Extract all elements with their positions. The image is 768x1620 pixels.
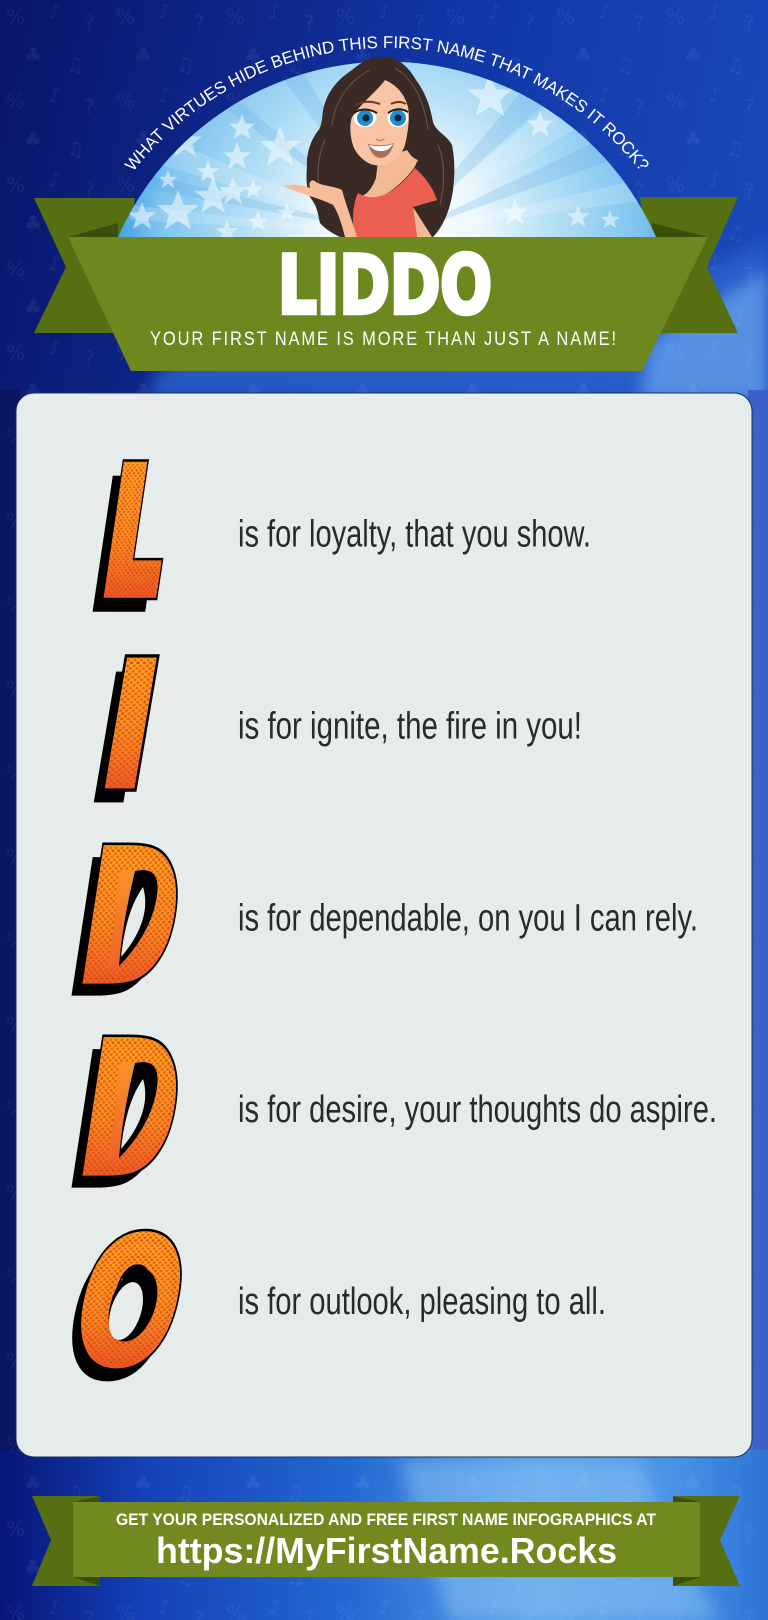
text: I line: is for ignite, the fire in you! (238, 706, 582, 748)
text: L line: is for loyalty, that you show. (238, 514, 591, 556)
letter D: D (68, 813, 194, 1023)
sunburst dome with stars (118, 62, 656, 237)
letter O: O (61, 1206, 199, 1401)
tagline: YOUR FIRST NAME IS MORE THAN JUST A NAME! (150, 328, 618, 350)
letter D second: D (57, 1017, 183, 1227)
letter D second: D (68, 1005, 194, 1215)
letter D second: D (68, 1005, 194, 1215)
letter I: I (89, 628, 171, 826)
text: O line: is for outlook, pleasing to all. (238, 1281, 606, 1323)
curved heading: WHAT VIRTUES HIDE BEHIND THIS FIRST NAME THAT MAKES IT ROCK? (124, 36, 649, 170)
letter D: D (68, 813, 194, 1023)
letter L: L (94, 435, 179, 631)
letter D: D (68, 813, 194, 1023)
letter I: I (89, 628, 171, 826)
panel: acrostic (16, 393, 752, 1457)
letter L: L (83, 449, 168, 645)
illustration: woman (283, 57, 454, 237)
letter I: I (78, 642, 160, 840)
letter D second: D (68, 1005, 194, 1215)
back ribbon tails (34, 197, 738, 333)
footer line: GET YOUR PERSONALIZED AND FREE FIRST NAME INFOGRAPHICS AT (116, 1511, 656, 1529)
letter L: L (94, 435, 179, 631)
top ribbon (68, 237, 708, 371)
letter I: I (89, 628, 171, 826)
letter O: O (61, 1206, 199, 1401)
letter L: L (94, 435, 179, 631)
letter O: O (61, 1206, 199, 1401)
footer url: https://MyFirstName.Rocks (156, 1530, 617, 1571)
name title: LIDDO (278, 239, 492, 332)
letter D: D (57, 825, 183, 1035)
footer ribbon (32, 1496, 740, 1586)
letter O: O (52, 1219, 190, 1414)
